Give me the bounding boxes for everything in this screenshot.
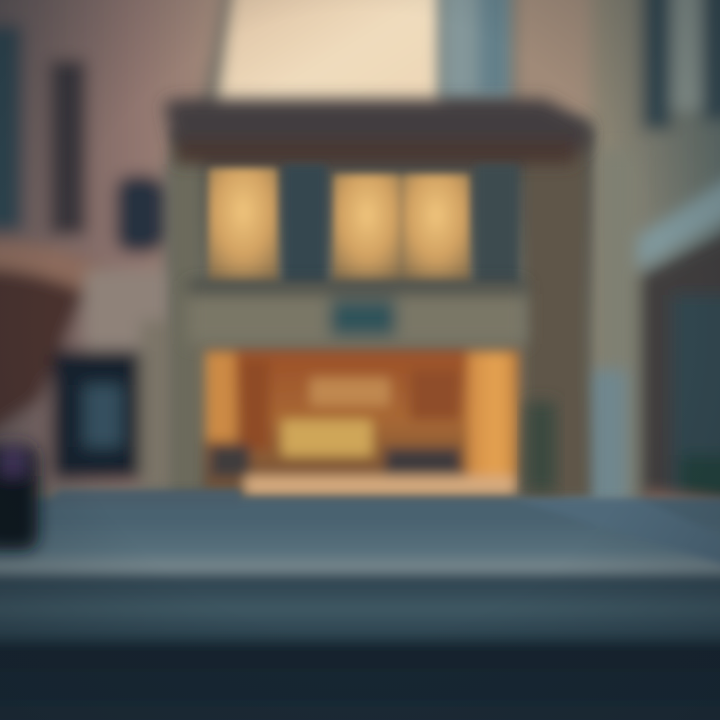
storefront roof cornice [164, 99, 592, 164]
shop window [205, 350, 520, 496]
plant by the door [526, 402, 556, 492]
upper windows [208, 165, 518, 283]
street and foreground [0, 490, 720, 720]
distant teal tower [440, 0, 515, 105]
lower band with sign [188, 282, 526, 344]
window dividers [284, 165, 518, 283]
window: left [208, 168, 278, 282]
storefront facade [172, 130, 592, 500]
shop sign [330, 300, 396, 336]
sky [215, 0, 442, 120]
building: right lower awning and recess [565, 150, 720, 530]
building: left [0, 0, 228, 490]
dark figure at left edge [0, 445, 38, 550]
building: far right upper [515, 0, 720, 520]
window: center double [333, 174, 470, 282]
